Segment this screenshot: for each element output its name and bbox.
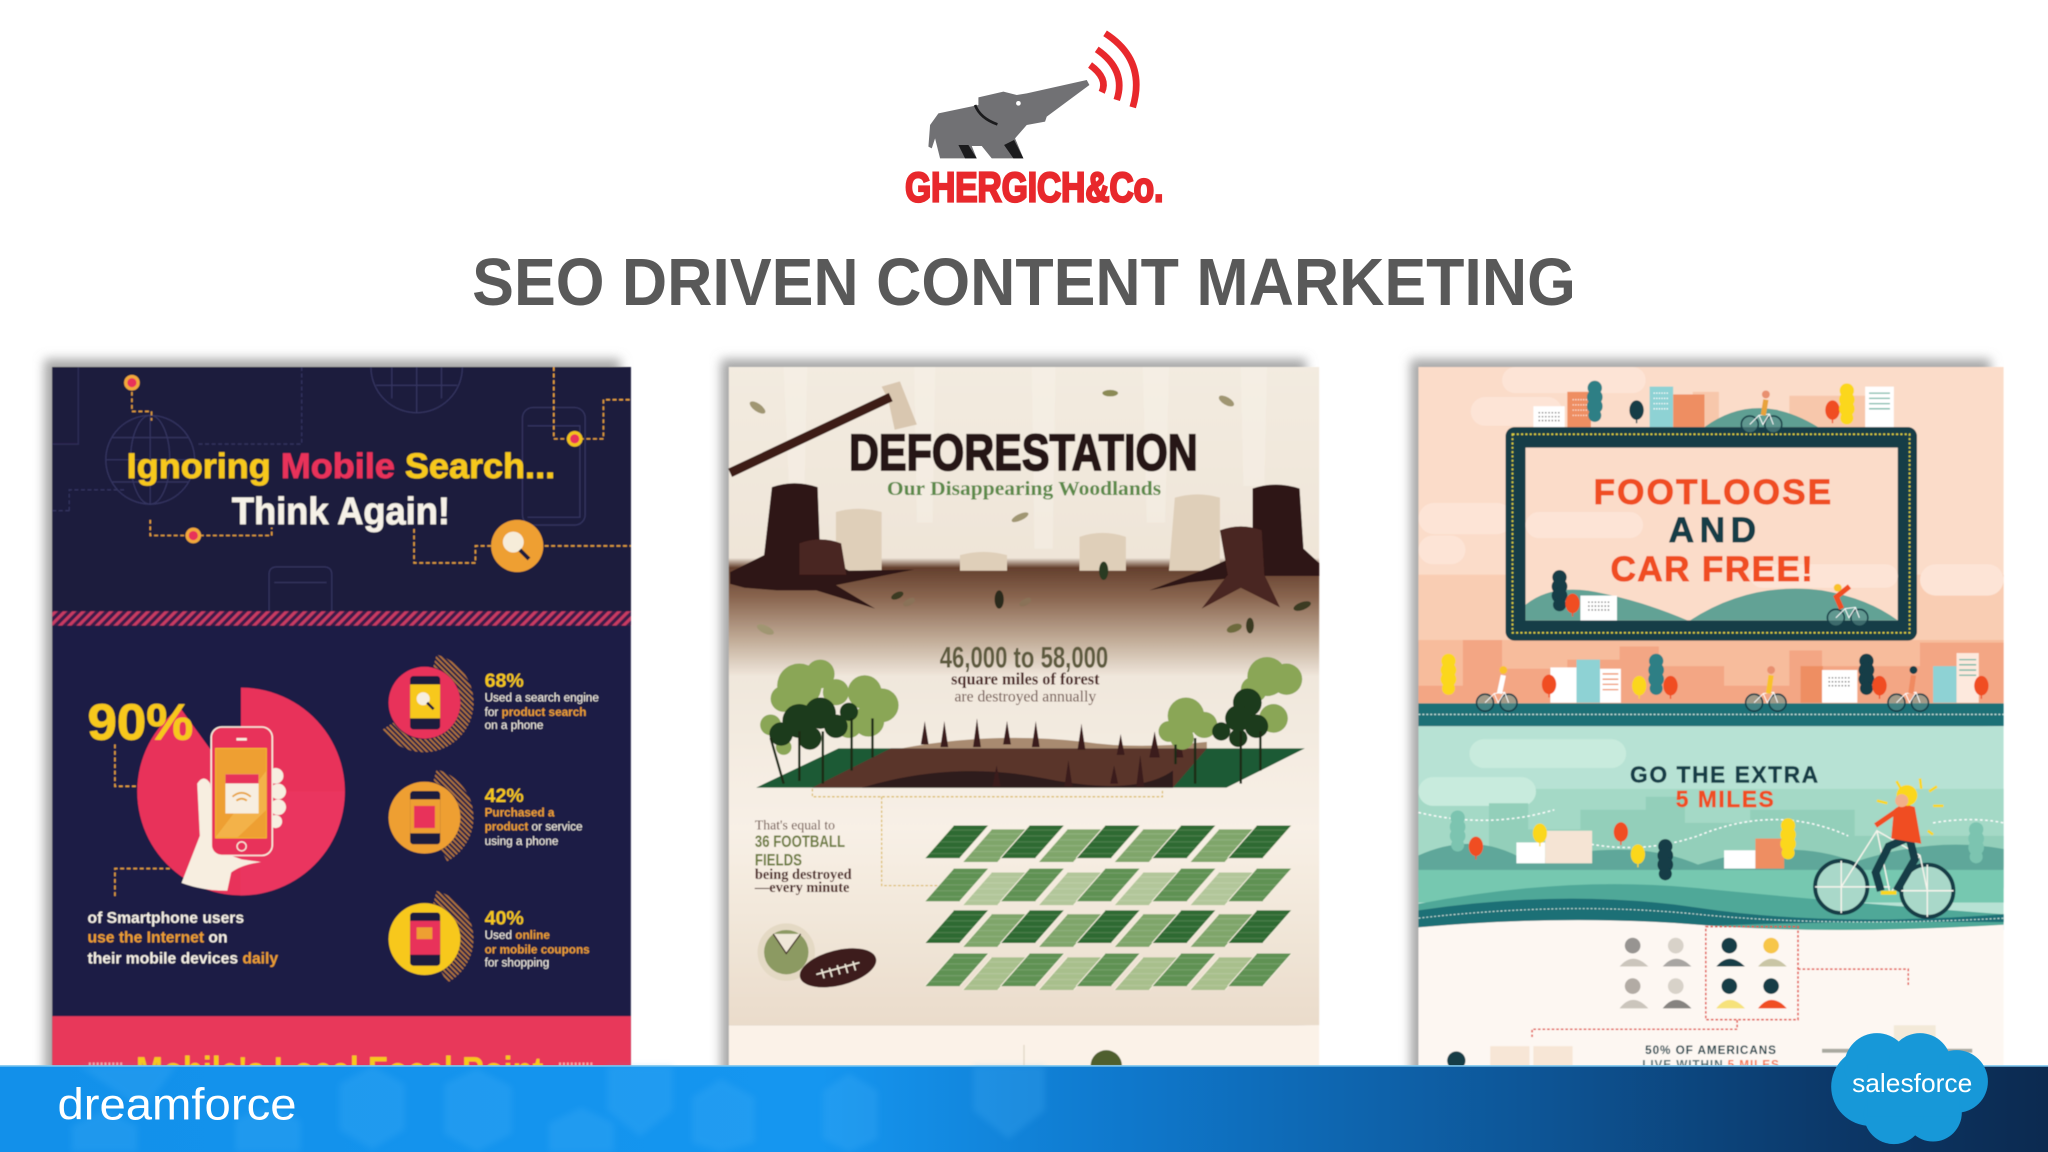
stat row: 42% xyxy=(389,776,583,856)
stat row: 42%: 42% xyxy=(485,785,524,807)
stat: 90%: 90% xyxy=(88,693,193,750)
red section heading xyxy=(52,1016,631,1093)
red section heading: Mobile's Local Focal Point xyxy=(136,1050,543,1093)
trees left xyxy=(760,660,899,784)
text: smartphone users: use the Internet on xyxy=(88,929,228,946)
title: SEO DRIVEN CONTENT MARKETING xyxy=(472,246,1576,320)
stat row: 40%: Used online xyxy=(485,929,550,942)
title billboard xyxy=(1506,427,1917,641)
text: football fields: FIELDS xyxy=(755,850,802,869)
text: football fields: 36 FOOTBALL xyxy=(755,832,845,851)
stat row: 40%: or mobile coupons xyxy=(485,943,590,956)
panel: footloose and car free infographic xyxy=(1411,359,2004,1091)
icon: stopwatch xyxy=(758,923,815,981)
stat row: 68% xyxy=(388,661,599,746)
stat row: 68%: 68% xyxy=(485,670,524,692)
orange dashed connectors xyxy=(115,367,631,896)
dashed connector xyxy=(812,789,1162,886)
text: football fields: being destroyed xyxy=(755,867,852,883)
faint lower buildings xyxy=(1447,1025,1972,1072)
text: 50 percent of americans: 50% OF AMERICANS xyxy=(1645,1044,1777,1057)
icon: magnifier xyxy=(491,520,543,572)
next section globe xyxy=(1091,1050,1122,1066)
pale stumps xyxy=(836,494,1220,571)
clouds xyxy=(1418,367,2004,596)
stat row: 40%: for shopping xyxy=(485,957,549,970)
road with cyclists xyxy=(1418,666,2004,726)
heading: go the extra 5 miles: 5 MILES xyxy=(1676,786,1774,812)
people grid xyxy=(1620,938,1787,1008)
heading: deforestation xyxy=(849,424,1198,500)
icon: hand holding phone xyxy=(182,727,286,891)
icon: map pins xyxy=(124,375,583,543)
heading: deforestation: Our Disappearing Woodlands xyxy=(887,478,1161,500)
mint landscape xyxy=(1418,726,2004,930)
heading: go the extra 5 miles xyxy=(1630,761,1818,812)
dark stumps and roots xyxy=(730,483,1319,609)
heading: deforestation: DEFORESTATION xyxy=(849,424,1198,481)
pale tree silhouettes xyxy=(784,367,1267,549)
pie chart: 90 percent xyxy=(137,688,345,896)
stat row: 40% xyxy=(389,897,590,977)
logo: Ghergich & Co. xyxy=(905,33,1163,211)
hexagon texture xyxy=(72,1066,1045,1152)
dreamforce wordmark: dreamforce xyxy=(57,1080,296,1129)
icon: elephant xyxy=(928,80,1089,158)
football field grid xyxy=(925,825,1292,990)
billboard heading: CAR FREE! xyxy=(1610,550,1813,589)
text: football fields xyxy=(754,817,852,896)
billboard heading: FOOTLOOSE xyxy=(1593,473,1831,512)
illustration: big cyclist xyxy=(1815,778,1953,917)
icon: axe xyxy=(730,381,917,473)
icon: signal waves xyxy=(1090,33,1136,107)
text: football fields: That's equal to xyxy=(755,817,835,832)
logo wordmark: GHERGICH&Co. xyxy=(905,165,1163,211)
background line art: globes and phones xyxy=(52,367,585,611)
billboard heading xyxy=(1593,473,1831,589)
footer band xyxy=(0,1065,2048,1152)
text: smartphone users: of Smartphone users xyxy=(88,910,244,927)
text: smartphone users: their mobile devices daily xyxy=(88,950,278,967)
stat row: 68%: Used a search engine xyxy=(485,691,599,704)
stat: square miles xyxy=(940,641,1108,705)
deforested land xyxy=(756,718,1305,788)
text: 50 percent of americans xyxy=(1642,1044,1780,1071)
panel: deforestation infographic xyxy=(721,359,1319,1091)
salesforce cloud logo: salesforce xyxy=(1852,1068,1972,1098)
panel: mobile search infographic xyxy=(44,359,631,1093)
top city skyline xyxy=(1533,381,1894,427)
lower white section xyxy=(1418,920,2004,1078)
mid city row xyxy=(1418,640,2004,703)
heading: ignoring mobile search: Ignoring Mobile Search... xyxy=(127,447,555,486)
bike on billboard top xyxy=(1741,391,1782,433)
stat row: 42%: using a phone xyxy=(485,835,559,848)
falling leaves xyxy=(748,390,1312,637)
icon: football xyxy=(796,941,880,994)
stat row: 42%: product or service xyxy=(485,821,583,834)
heading: ignoring mobile search: Think Again! xyxy=(232,491,450,533)
stat: square miles: are destroyed annually xyxy=(954,688,1096,705)
stat row: 68%: on a phone xyxy=(485,719,544,732)
heading: go the extra 5 miles: GO THE EXTRA xyxy=(1630,761,1818,787)
salesforce cloud logo xyxy=(1831,1033,1988,1144)
billboard heading: AND xyxy=(1669,511,1756,550)
stat: square miles: square miles of forest xyxy=(951,669,1100,688)
pink hatched divider xyxy=(52,611,631,626)
heading: ignoring mobile search xyxy=(127,447,555,533)
text: smartphone users xyxy=(88,910,278,967)
trees right xyxy=(1159,657,1302,784)
text: 50 percent of americans: LIVE WITHIN 5 MILES xyxy=(1642,1058,1780,1071)
stat: square miles: 46,000 to 58,000 xyxy=(940,641,1108,674)
red dotted selection xyxy=(1532,927,1908,1038)
stat row: 68%: for product search xyxy=(485,706,586,719)
text: football fields: —every minute xyxy=(754,880,849,896)
stat row: 40%: 40% xyxy=(485,908,524,930)
stat row: 42%: Purchased a xyxy=(485,806,555,819)
